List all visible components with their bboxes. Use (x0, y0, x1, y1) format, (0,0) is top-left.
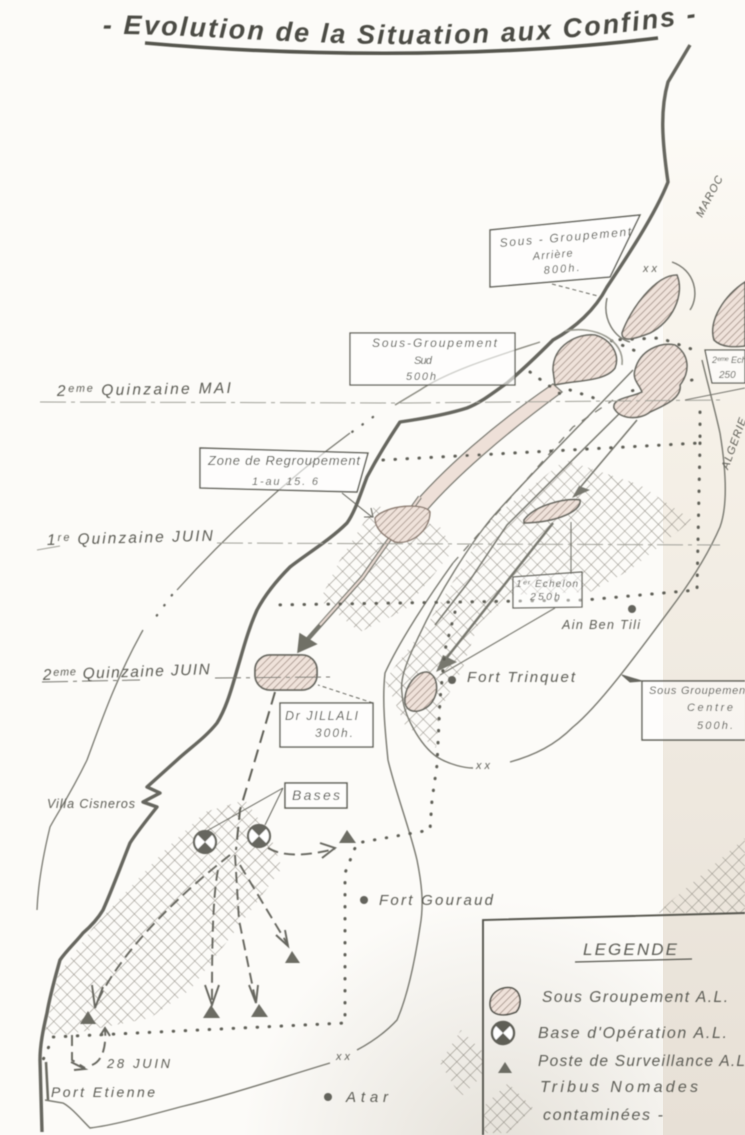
crossing marks: x x (475, 760, 491, 772)
places (324, 605, 636, 1101)
label: Port Etienne: Port Etienne (51, 1084, 155, 1100)
leader: Jillali (318, 685, 373, 703)
leader: echelon (440, 522, 571, 675)
blob: Fort Trinquet (405, 672, 437, 711)
box: Dr Jillali: Dr JILLALI (285, 709, 359, 723)
arc around Arriere (606, 262, 695, 342)
box: Zone de regroupement (200, 448, 368, 492)
box: Sous-Groupement Arriere: Sous - Groupement (499, 224, 632, 250)
box: Sous-Groupement Centre: Centre (687, 702, 733, 714)
label: 1ere Quinzaine Juin: 1ʳᵉ Quinzaine JUIN (47, 528, 214, 549)
dashed route: Jillali to bases (236, 692, 275, 850)
box: Bases (285, 783, 347, 808)
label: 2eme Quinzaine Mai: 2ᵉᵐᵉ Quinzaine MAI (56, 380, 232, 400)
panel: legend (483, 913, 745, 1135)
box: Sous-Groupement Sud: 500h (406, 371, 436, 383)
box: Sous-Groupement Sud: Sud (414, 355, 433, 367)
arc around Sud (565, 330, 622, 365)
label: 2eme Quinzaine Juin: 2ᵉᵐᵉ Quinzaine JUIN (42, 661, 211, 684)
blob: Centre troops (614, 344, 687, 418)
legend text: tribes: Tribus Nomades (540, 1079, 698, 1096)
crossing marks (335, 263, 658, 1063)
box: Zone de regroupement: Zone de Regroupement (207, 453, 361, 468)
corridor: Sud (307, 384, 562, 640)
bases of operation (194, 825, 270, 853)
legend title: LEGENDE (583, 940, 678, 959)
box: Sous-Groupement Sud (350, 333, 515, 385)
legend icon: base (492, 1022, 514, 1044)
southern territory curve (45, 563, 453, 1128)
crossing marks: x x (335, 1051, 351, 1063)
box: 1er Echelon: 1ᵉʳ Echelon (516, 579, 578, 590)
label: Maroc: MAROC (694, 173, 726, 219)
blob: Sud (553, 335, 616, 385)
crosshatch: tribes lower left (45, 800, 282, 1036)
dashed routes to posts (72, 848, 335, 1068)
title underline (145, 38, 658, 53)
outer thin boundary north-west (395, 342, 540, 405)
panel: legend: contaminées - (543, 1107, 663, 1124)
box: 2eme Echelon: 250 (718, 370, 736, 381)
label: 28 Juin: 28 JUIN (106, 1056, 171, 1071)
box: 1er Echelon: 250h (529, 591, 560, 603)
label: Fort Gouraud: Fort Gouraud (379, 892, 494, 909)
blob: Arriere (622, 275, 679, 339)
corridor: Centre (435, 408, 637, 660)
label: Ain Ben Tili: Ain Ben Tili (561, 618, 641, 632)
legend icon: troop group (490, 988, 520, 1015)
box: Sous-Groupement Arriere (490, 215, 640, 287)
box: Zone de regroupement: 1-au 15. 6 (252, 476, 319, 488)
box: Sous-Groupement Centre (642, 681, 745, 740)
blob: 2eme Echelon (713, 282, 745, 347)
dashed upper extension of territory (453, 400, 613, 563)
blob: Jillali (255, 655, 317, 690)
crossing marks: x x (642, 263, 658, 275)
legend swatch: tribes inside (484, 1083, 533, 1133)
legend icon: post (498, 1062, 512, 1073)
leader: Arriere (552, 284, 598, 296)
legend title underline (575, 959, 692, 962)
box: 2eme Echelon (705, 350, 745, 383)
arrow: Sud to Jillali (298, 634, 316, 652)
arrow: 2eme Echelon leader (685, 388, 745, 400)
crosshatch: tribes centre (385, 460, 692, 748)
box: Dr Jillali (280, 703, 373, 747)
box: Bases: Bases (292, 787, 340, 803)
box: Sous-Groupement Centre: 500h. (697, 720, 733, 732)
Port Etienne inlet (46, 1062, 48, 1100)
label: Fort Trinquet: Fort Trinquet (467, 669, 576, 686)
legend text: troop group: Sous Groupement A.L. (542, 989, 728, 1006)
arrow: Centre leader (622, 675, 642, 682)
legend swatch: tribes outside (440, 1030, 483, 1097)
legend text: post: Poste de Surveillance A.L (538, 1053, 745, 1070)
box: Dr Jillali: 300h. (315, 726, 353, 740)
dotted trails (43, 308, 700, 1060)
arrow heads on routes (71, 843, 335, 1070)
leader: Bases (205, 788, 283, 832)
Sous-Groupement Centre territory curve (402, 360, 725, 768)
outer boundary dotted crosses (152, 417, 373, 622)
box: Sous-Groupement Arriere: 800h. (543, 262, 580, 277)
arrow heads: Centre (436, 486, 590, 672)
box: Sous-Groupement Sud: Sous-Groupement (372, 336, 498, 350)
blob: regroupement zone (375, 506, 430, 542)
crosshatch: tribes middle (320, 505, 452, 632)
label: Villa Cisneros: Villa Cisneros (47, 797, 135, 811)
title: - Evolution de la Situation aux Confins - (103, 10, 696, 46)
quinzaine lines (37, 400, 720, 682)
legend text: base: Base d'Opération A.L. (538, 1025, 727, 1042)
surveillance posts (80, 830, 356, 1024)
outer boundary lower (37, 433, 350, 910)
crosshatch: tribes right (657, 838, 745, 913)
blob: echelon oval (524, 500, 580, 523)
box: 1er Echelon (513, 572, 582, 608)
arrow: regroupement leader (342, 493, 373, 517)
label: Atar: Atar (345, 1089, 389, 1106)
box: Sous-Groupement Arriere: Arrière (531, 248, 573, 263)
